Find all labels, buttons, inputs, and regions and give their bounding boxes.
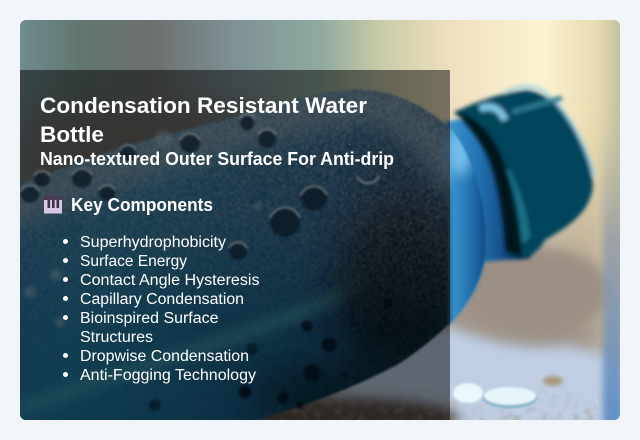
photo: water droplets xyxy=(21,114,393,411)
photo: bottle neck xyxy=(445,105,530,325)
icon: piano keys xyxy=(44,196,62,214)
photo: coins on sand xyxy=(453,383,537,408)
title xyxy=(40,93,367,147)
list: key components: Capillary Condensation xyxy=(80,291,244,308)
photo: bottle cap xyxy=(453,87,594,258)
list: key components: Dropwise Condensation xyxy=(80,348,249,365)
heading text: Key Components xyxy=(71,195,213,215)
list: key components: Structures xyxy=(80,329,153,346)
list: key components: Surface Energy xyxy=(80,253,187,270)
title: Condensation Resistant Water xyxy=(40,93,367,118)
photo: sand surface xyxy=(260,321,620,420)
list: key components: Contact Angle Hysteresis xyxy=(80,272,260,289)
section heading: key components xyxy=(44,195,213,215)
list: key components: Anti-Fogging Technology xyxy=(80,367,256,384)
photo: right window strip xyxy=(603,120,623,425)
list: key components xyxy=(63,234,260,384)
translucent text panel xyxy=(20,70,450,420)
list: key components: Bioinspired Surface xyxy=(80,310,218,327)
title: Bottle xyxy=(40,122,104,147)
list: key components: Superhydrophobicity xyxy=(80,234,226,251)
photo: bottle body xyxy=(20,88,486,420)
subtitle: Nano-textured Outer Surface For Anti-drip xyxy=(40,149,394,169)
